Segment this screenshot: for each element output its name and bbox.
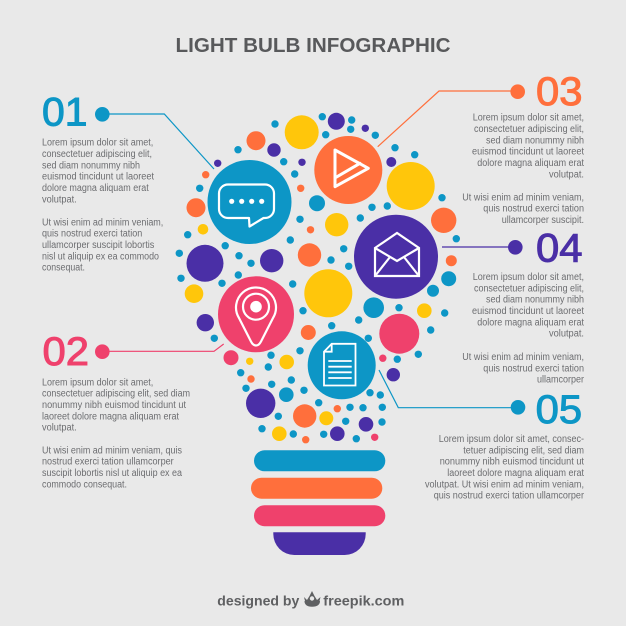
text 01: sed diam nonummy nibh	[42, 160, 140, 171]
footer credit	[217, 591, 404, 608]
text 03: sed diam nonummy nibh	[486, 135, 584, 146]
text 03: quis nostrud exerci tation	[483, 204, 584, 215]
text 01: euismod tincidunt ut laoreet	[42, 172, 154, 183]
text 02	[42, 377, 190, 490]
text 01: Lorem ipsum dolor sit amet,	[42, 138, 153, 149]
icon: location pin on pink circle	[218, 276, 294, 352]
number 04: 04	[536, 226, 582, 270]
text 03: Lorem ipsum dolor sit amet,	[473, 113, 584, 124]
number 01: 01	[42, 91, 88, 135]
text 04: dolore magna aliquam erat	[477, 317, 584, 328]
text 05	[425, 434, 585, 502]
number 02: 02	[42, 330, 89, 374]
text 05: laoreet dolore magna aliquam erat	[447, 468, 584, 479]
text 01: Ut wisi enim ad minim veniam,	[42, 217, 163, 228]
icon: freepik logo	[304, 591, 320, 607]
text 03: ullamcorper suscipit.	[502, 215, 584, 226]
number 03: 03	[536, 70, 582, 114]
connector 02	[95, 344, 224, 359]
text 01: consectetuer adipiscing elit,	[42, 149, 152, 160]
text 01: nisl ut aliquip ex ea commodo	[42, 251, 159, 262]
text 04: euismod tincidunt ut laoreet	[472, 306, 584, 317]
text 02: volutpat.	[42, 423, 77, 434]
panel: step 04	[442, 226, 585, 386]
connector 04	[442, 240, 523, 255]
icon: envelope on purple circle	[354, 215, 438, 299]
text 04: Lorem ipsum dolor sit amet,	[473, 272, 584, 283]
panel: step 01	[42, 91, 214, 274]
icon: chat bubble on blue circle	[208, 160, 292, 244]
text 04: quis nostrud exerci tation	[483, 363, 584, 374]
text 02: nonummy nibh euismod tincidunt ut	[42, 400, 186, 411]
text 05: Lorem ipsum dolor sit amet, consec-	[439, 434, 584, 445]
text 02: consectetuer adipiscing elit, sed diam	[42, 389, 190, 400]
panel: step 05	[379, 370, 585, 502]
text 04	[462, 272, 585, 386]
title: LIGHT BULB INFOGRAPHIC	[176, 34, 451, 57]
text 04: volutpat.	[549, 329, 584, 340]
text 01: ullamcorper suscipit lobortis	[42, 240, 154, 251]
number 05: 05	[536, 388, 582, 432]
text 04: sed diam nonummy nibh	[486, 295, 584, 306]
connector 01	[95, 107, 214, 169]
text 05: volutpat. Ut wisi enim ad minim veniam,	[425, 479, 584, 490]
text 05: tetuer adipiscing elit, sed diam	[463, 445, 584, 456]
text 02: laoreet dolore magna aliquam erat	[42, 411, 179, 422]
connector 05	[379, 370, 525, 415]
text 03: euismod tincidunt ut laoreet	[472, 147, 584, 158]
text 01: quis nostrud exerci tation	[42, 229, 142, 240]
text 03: consectetuer adipiscing elit,	[474, 124, 584, 135]
text 04: Ut wisi enim ad minim veniam,	[462, 352, 584, 363]
footer credit: designed by	[217, 592, 300, 608]
connector 03	[378, 84, 525, 147]
icon: document on blue circle	[308, 331, 376, 399]
text 02: Ut wisi enim ad minim veniam, quis	[42, 445, 182, 456]
text 03	[462, 113, 584, 226]
text 05: quis nostrud exerci tation ullamcorper	[434, 491, 585, 502]
text 03: volutpat.	[549, 169, 584, 180]
text 01: consequat.	[42, 263, 85, 274]
bulb dots	[176, 113, 460, 443]
text 02: suscipit lobortis nisl ut aliquip ex ea	[42, 468, 182, 479]
text 03: Ut wisi enim ad minim veniam,	[462, 192, 584, 203]
text 02: commodo consequat.	[42, 479, 127, 490]
text 04: consectetuer adipiscing elit,	[474, 283, 584, 294]
text 01	[42, 138, 163, 274]
panel: step 02	[42, 330, 224, 490]
icon: play button on orange circle	[314, 136, 382, 204]
text 04: ullamcorper	[537, 375, 585, 386]
text 01: dolore magna aliquam erat	[42, 183, 149, 194]
text 03: dolore magna aliquam erat	[477, 158, 584, 169]
panel: step 03	[378, 70, 584, 226]
text 02: nostrud exerci tation ullamcorper	[42, 457, 174, 468]
text 01: volutpat.	[42, 194, 77, 205]
footer credit: freepik.com	[323, 592, 404, 608]
text 02: Lorem ipsum dolor sit amet,	[42, 377, 153, 388]
text 05: nonummy nibh euismod tincidunt ut	[440, 457, 584, 468]
bulb base	[251, 450, 385, 555]
